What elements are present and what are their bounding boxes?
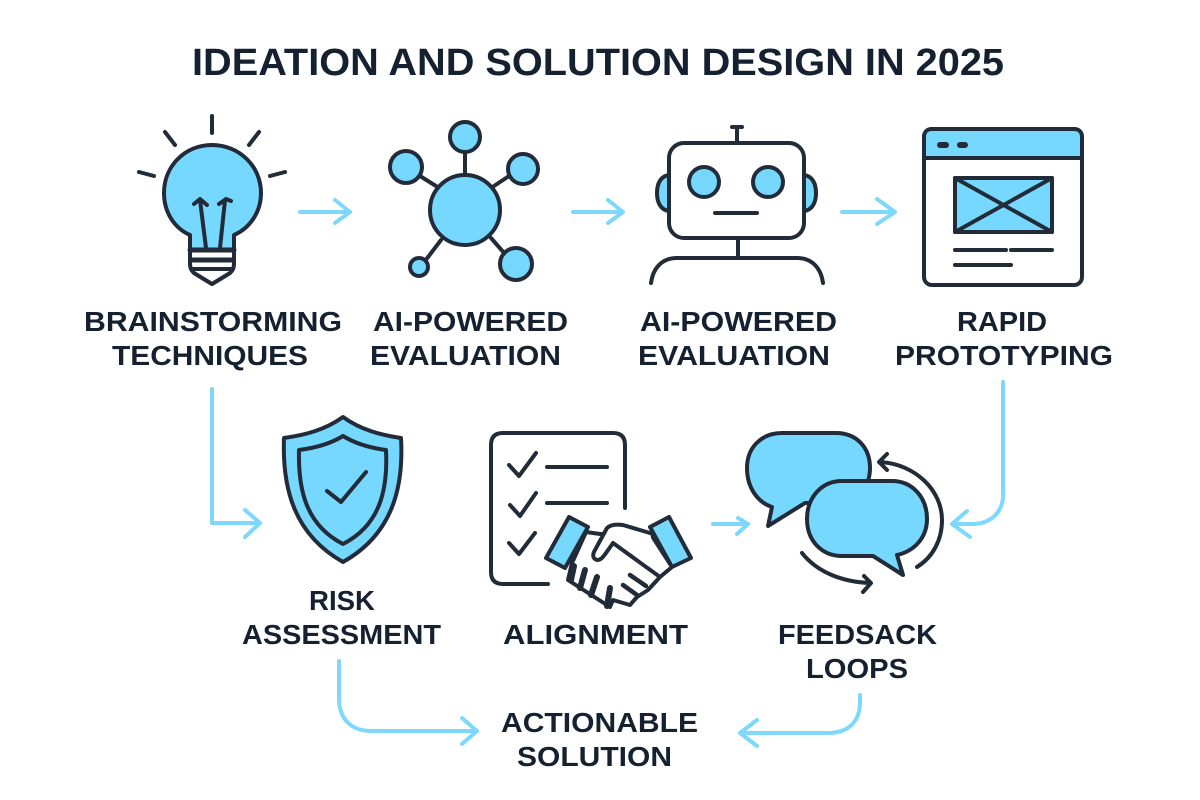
icon: light bulb (139, 116, 285, 284)
title: IDEATION AND SOLUTION DESIGN IN 2025 (192, 42, 1004, 84)
arrow: network to robot (573, 200, 623, 223)
label: AI-powered evaluation (first) (370, 306, 568, 371)
label: rapid prototyping (895, 306, 1113, 371)
label: feedback loops: LOOPS (806, 653, 908, 684)
label: rapid prototyping: PROTOTYPING (895, 340, 1113, 371)
arrow: robot to prototype (842, 199, 895, 224)
label: actionable solution: SOLUTION (517, 741, 672, 772)
label: AI-powered evaluation (first): AI-POWERED (373, 306, 568, 337)
label: brainstorming techniques: BRAINSTORMING (84, 306, 342, 337)
icon: feedback speech bubbles with loop arrows (747, 433, 942, 592)
icon: shield (284, 417, 401, 562)
icon: robot (651, 127, 823, 283)
arrow: bulb to network (300, 200, 350, 223)
label: actionable solution (501, 707, 698, 772)
label: risk assessment: RISK (309, 585, 375, 616)
label: feedback loops: FEEDSACK (778, 619, 937, 650)
arrow: feedback to actionable solution (740, 695, 860, 746)
label: brainstorming techniques (84, 306, 342, 371)
icon: checklist and handshake (491, 433, 691, 607)
arrow: alignment to feedback (713, 518, 748, 534)
label: brainstorming techniques: TECHNIQUES (112, 340, 308, 371)
label: feedback loops (778, 619, 937, 684)
icon: browser wireframe (924, 129, 1082, 285)
label: AI-powered evaluation (second): EVALUATION (638, 340, 830, 371)
label: AI-powered evaluation (second) (638, 306, 837, 371)
arrow: risk to actionable solution (339, 661, 477, 744)
label: AI-powered evaluation (second): AI-POWERED (640, 306, 837, 337)
label: AI-powered evaluation (first): EVALUATION (370, 340, 561, 371)
icon: network nodes (390, 122, 538, 280)
label: risk assessment: ASSESSMENT (242, 619, 441, 650)
label: alignment: ALIGNMENT (503, 619, 688, 650)
arrow: brainstorming down to risk (212, 389, 260, 537)
label: risk assessment (242, 585, 441, 650)
label: actionable solution: ACTIONABLE (501, 707, 698, 738)
arrow: prototyping down to feedback (952, 382, 1003, 537)
label: rapid prototyping: RAPID (957, 306, 1047, 337)
